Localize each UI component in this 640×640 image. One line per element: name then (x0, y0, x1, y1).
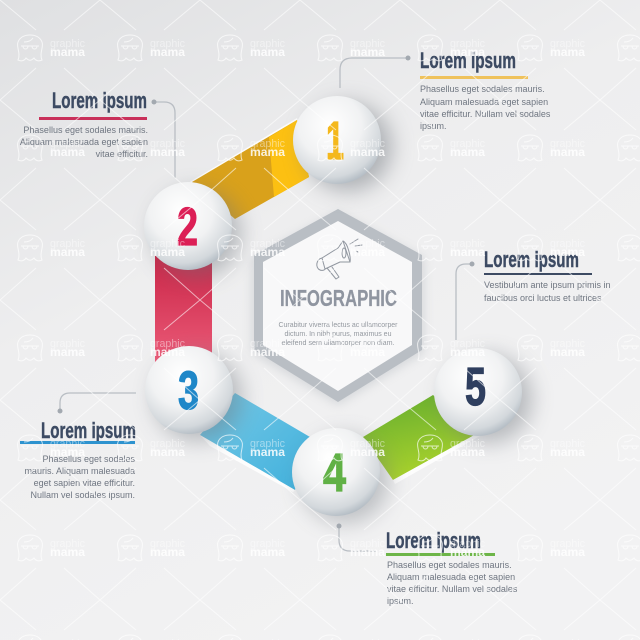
sphere 1 (293, 96, 392, 191)
callout 4: Aliquam malesuada eget sapien (387, 572, 515, 582)
hexagon text: eleifend sem ullamcorper non diam. (282, 338, 394, 347)
callout 1: Lorem ipsum (420, 48, 516, 73)
callout 4: vitae efficitur. Nullam vel sodales (387, 584, 518, 594)
sphere 5 (434, 348, 532, 443)
hexagon text: dictum. In nibh purus, maximus eu (284, 329, 392, 338)
sphere 1: 1 (326, 111, 344, 171)
callout 5: Vestibulum ante ipsum primis in (484, 280, 611, 290)
hexagon text (278, 320, 398, 347)
callout 2: Aliquam malesuada eget sapien (20, 137, 148, 147)
connector ribbons (155, 118, 480, 492)
sphere 3: 3 (178, 361, 199, 421)
callout 4: Phasellus eget sodales mauris. (387, 560, 512, 570)
callout 2: vitae efficitur. (96, 149, 148, 159)
central hexagon (252, 209, 424, 405)
ribbon: blue segment 3-4 (200, 393, 310, 492)
sphere 2: 2 (177, 197, 198, 257)
callout 4: Lorem ipsum (386, 528, 481, 553)
callout 5: faucibus orci luctus et ultrices (484, 293, 602, 303)
callout 3 (20, 393, 136, 500)
sphere 4: 4 (323, 443, 346, 503)
callout 1: vitae efficitur. Nullam vel sodales (420, 109, 551, 119)
callout 3: Lorem ipsum (41, 418, 136, 443)
callout 3: mauris. Aliquam malesuada (24, 466, 135, 476)
icon: megaphone (317, 239, 362, 279)
callout 3: Nullam vel sodales ipsum. (30, 490, 135, 500)
sphere 3 (145, 346, 242, 441)
callout 1 (340, 48, 551, 131)
callout 5: Lorem ipsum (484, 247, 579, 272)
callout 4 (336, 524, 518, 606)
callout 2: Lorem ipsum (52, 88, 147, 113)
callout 1: Aliquam malesuada eget sapien (420, 97, 548, 107)
callout 2: Phasellus eget sodales mauris. (23, 125, 148, 135)
hexagon title: INFOGRAPHIC (280, 285, 397, 311)
hexagon text: Curabitur viverra lectus ac ullamcorper (278, 320, 398, 329)
callout 2 (20, 88, 175, 178)
callout 3: Phasellus eget sodales (42, 454, 135, 464)
ribbon: green segment 4-5 (363, 395, 480, 484)
sphere 5: 5 (465, 357, 486, 417)
callout 4: ipsum. (387, 596, 414, 606)
ribbon: yellow segment 1-2 (188, 118, 309, 219)
sphere 4 (292, 428, 389, 523)
sphere 2 (144, 182, 241, 277)
ribbon: red segment 2-3 (155, 245, 212, 370)
callout 5 (456, 247, 611, 340)
callout 3: eget sapien vitae efficitur. (34, 478, 135, 488)
callout 1: ipsum. (420, 121, 447, 131)
callout 1: Phasellus eget sodales mauris. (420, 84, 545, 94)
